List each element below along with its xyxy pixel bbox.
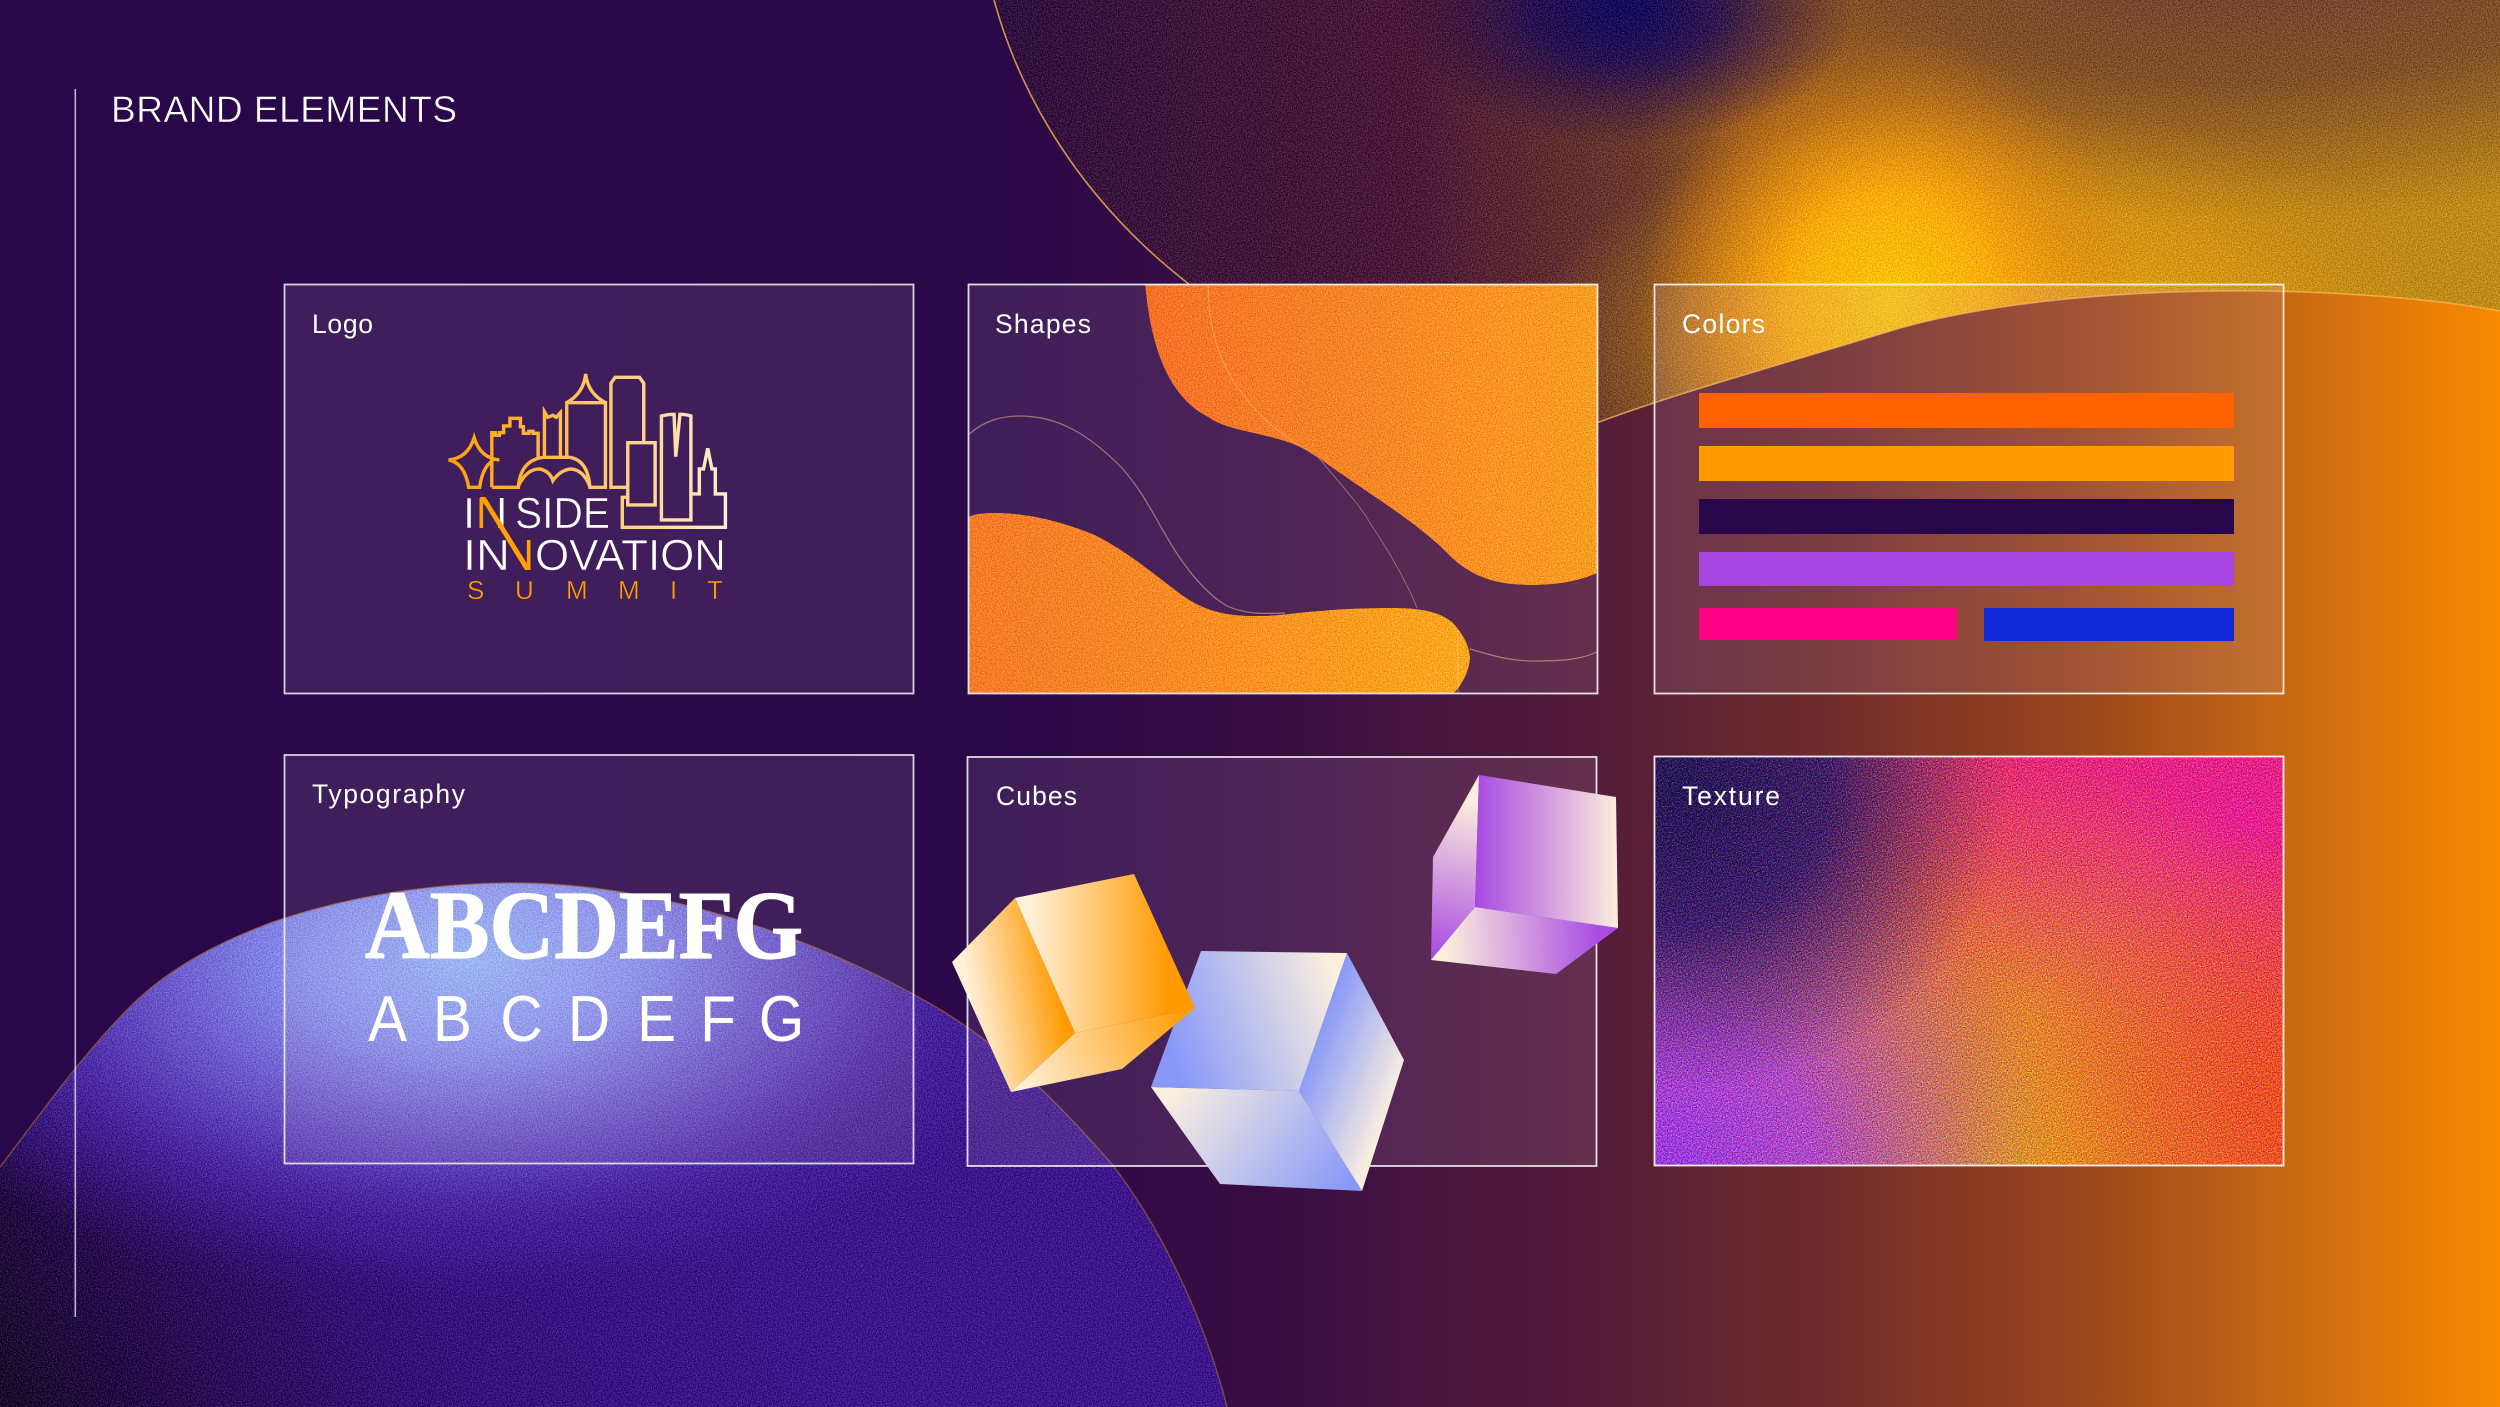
swatch: magenta xyxy=(1699,608,1957,640)
orange organic shapes xyxy=(968,284,1597,693)
panel: texture xyxy=(1654,756,2284,1166)
panel: colors xyxy=(1654,284,2284,694)
bottom left glowing shape xyxy=(0,870,1240,1407)
logo wordmark: N xyxy=(476,490,507,538)
bottom shape edge xyxy=(0,883,1227,1407)
logo wordmark: IN xyxy=(463,532,510,580)
sans specimen: ABCDEFG xyxy=(368,983,804,1056)
panel: logo xyxy=(284,284,914,694)
title: BRAND ELEMENTS xyxy=(111,89,457,130)
panel: typography xyxy=(284,755,914,1164)
label: typography: Typography xyxy=(312,779,466,809)
logo wordmark: OVATION xyxy=(535,532,726,580)
vertical rule xyxy=(74,89,76,1317)
logo wordmark: SIDE xyxy=(515,490,610,538)
logo wordmark: SUMMIT xyxy=(467,575,723,605)
label: logo: Logo xyxy=(312,309,373,339)
panel: cubes xyxy=(952,757,1618,1191)
serif specimen: ABCDEFG xyxy=(365,872,803,980)
panel frame: shapes xyxy=(968,284,1598,694)
swatch: blue xyxy=(1984,608,2234,641)
panel frame: texture xyxy=(1654,756,2284,1166)
panel: shapes xyxy=(968,284,1598,694)
logo wordmark: N xyxy=(503,532,534,580)
top right glowing shape xyxy=(995,0,2500,422)
logo wordmark xyxy=(467,497,722,600)
label: colors: Colors xyxy=(1682,309,1765,339)
cube: blue xyxy=(1151,951,1404,1191)
top shape edge xyxy=(994,0,2500,442)
logo wordmark: I xyxy=(463,490,475,538)
swatch: deep purple xyxy=(1699,499,2234,534)
cube: purple xyxy=(1431,775,1618,974)
cube: orange xyxy=(952,874,1195,1092)
icon: city skyline logo xyxy=(448,374,725,527)
swatch: violet xyxy=(1699,552,2234,586)
label: cubes: Cubes xyxy=(996,781,1077,811)
label: texture: Texture xyxy=(1682,781,1780,811)
label: shapes: Shapes xyxy=(995,309,1091,339)
grainy gradient xyxy=(1654,756,2283,1165)
swatch: orange xyxy=(1699,393,2234,428)
swatch: amber xyxy=(1699,446,2234,481)
